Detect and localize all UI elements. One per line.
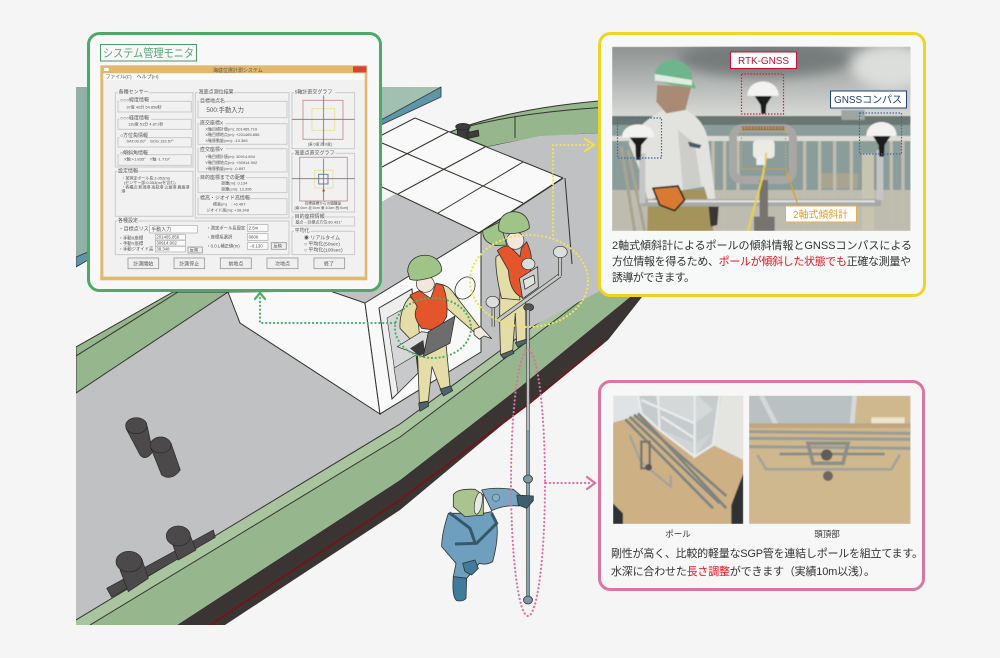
cabin walls xyxy=(228,178,640,414)
laptop xyxy=(397,316,455,357)
seabed cross graph xyxy=(292,149,355,212)
equipment photo xyxy=(612,40,931,231)
software window xyxy=(100,65,367,280)
GNSS compass label: GNSSコンパス xyxy=(834,94,902,106)
panel: GNSS equipment xyxy=(600,34,931,296)
sensors group xyxy=(115,89,193,167)
settings group: ・手動X座標 xyxy=(119,234,144,241)
control buttons xyxy=(128,258,345,269)
seabed results: 距離(m): 0.134 xyxy=(221,180,248,186)
photo captions: ポール xyxy=(665,529,691,539)
photo captions: 頭頂部 xyxy=(814,529,840,539)
monitor heading: システム管理モニタ xyxy=(103,46,194,60)
settings group: 38.348 xyxy=(156,247,170,252)
panel: system monitor xyxy=(88,34,380,290)
sounding pole xyxy=(524,310,532,604)
seabed results: 距離(cm): 13.395 xyxy=(221,186,252,192)
averaging options: ◉ リアルタイム xyxy=(304,234,340,241)
monitor heading xyxy=(100,44,196,61)
averaging options: ○ 平均化(100sec) xyxy=(304,246,343,253)
antenna cross graph xyxy=(292,89,355,149)
settings info xyxy=(115,167,193,216)
settings group: ・手動Y座標 xyxy=(119,240,144,247)
settings group: 30914.902 xyxy=(156,241,177,246)
compass highlights xyxy=(618,113,902,158)
green callout circle xyxy=(260,297,471,358)
pole photo xyxy=(613,396,743,524)
sensors group: 各種センサー xyxy=(119,89,149,96)
settings group: 手動入力 xyxy=(151,226,171,233)
backpack xyxy=(483,222,507,246)
GNSS description: 誘導ができます。 xyxy=(612,270,695,284)
pink arrow head xyxy=(587,477,595,489)
tilt meter label: 2軸式傾斜計 xyxy=(793,208,848,221)
sensors group: X軸:+1.835° Y軸:-1.719° xyxy=(124,156,171,162)
pole description: 剛性が高く、比較的軽量なSGP管を連結しポールを組立てます。 xyxy=(611,546,923,560)
seabed results: 標高(m) : +6.467 xyxy=(213,200,246,206)
seabed results: ジオイド高(m): +38.348 xyxy=(206,206,250,212)
sensors group: 37度 40分 54.858秒 xyxy=(126,103,162,109)
yellow callout circle xyxy=(470,145,590,327)
deck xyxy=(76,132,640,620)
yellow arrow head xyxy=(585,139,594,151)
seabed results: Y軸移動量(cm): -0.897 xyxy=(205,165,246,171)
boots xyxy=(501,339,527,358)
seabed cross graph: [南:0cm 北:0cm 東:10cm 西:0cm] xyxy=(295,205,348,210)
seabed results: 500:手動入力 xyxy=(206,105,244,114)
averaging options xyxy=(292,227,355,255)
settings group: −0.130 xyxy=(249,244,263,249)
cabin door recess xyxy=(379,289,418,399)
dotted callouts xyxy=(255,139,595,616)
pointing arm xyxy=(436,283,481,332)
arm xyxy=(496,250,520,300)
settings info: 港 xyxy=(121,188,125,194)
seabed results: Y軸目標計値(m): 30914.894 xyxy=(205,153,256,159)
control buttons: 次地点 xyxy=(275,260,290,267)
boots xyxy=(419,386,453,411)
seabed results: 直交座標X xyxy=(200,119,224,126)
starboard hull xyxy=(76,262,642,625)
tilt meter label xyxy=(786,206,856,222)
panel: pole xyxy=(600,382,924,590)
sensors group: SAT:00.00° SOG:133.57° xyxy=(126,139,174,144)
settings group: 各種設定 xyxy=(118,217,138,224)
seabed results: X軸目標計値(m): 201465.719 xyxy=(205,125,258,131)
cabin rear roof xyxy=(76,87,441,267)
seabed results: X軸目標地点(m): +201465.856 xyxy=(205,131,260,137)
settings group: 反映 xyxy=(190,247,199,254)
settings info: (センサー部:0.053(m)を含む) xyxy=(124,179,176,185)
ship illustration xyxy=(76,87,642,625)
seabed results: X軸移動量(cm): -13.365 xyxy=(205,137,248,143)
sensors group: ○方位角情報 xyxy=(120,132,148,139)
RTK-GNSS highlight xyxy=(742,74,784,114)
settings group: 反映 xyxy=(273,243,283,250)
GNSS description: 2軸式傾斜計によるポールの傾斜情報とGNSSコンパスによる xyxy=(612,238,912,252)
hand xyxy=(474,327,492,339)
green arrow head xyxy=(255,293,265,299)
surveyor behind with pole xyxy=(483,212,567,358)
vest xyxy=(410,283,447,331)
sensors group: ○○○緯度情報 xyxy=(120,97,149,104)
settings group: 0806 xyxy=(249,235,259,240)
seabed results: 海底点測位結果 xyxy=(199,89,234,96)
mooring bitts xyxy=(107,526,215,597)
software window: 海底位置計測システム xyxy=(213,67,263,74)
settings group: ・0.0.L補正値(m) xyxy=(206,242,240,249)
averaging options: ○ 平均化(50sec) xyxy=(304,240,340,247)
seabed results: Y軸目標地点(m): +30914.902 xyxy=(205,159,258,165)
sensors group: ○傾斜角情報 xyxy=(120,149,148,156)
control buttons: 計測開始 xyxy=(133,260,153,267)
settings group xyxy=(115,217,289,255)
legs xyxy=(500,290,526,355)
surveyor with laptop xyxy=(397,255,492,411)
pink callout ellipse xyxy=(511,350,590,616)
legs xyxy=(417,343,450,403)
GNSS description xyxy=(612,238,912,284)
seabed cross graph: 目標座標からの偏離量 xyxy=(305,200,342,205)
control buttons: 計測停止 xyxy=(179,260,199,267)
seabed results: 目標地点名 xyxy=(200,97,225,104)
face xyxy=(416,276,434,292)
pole description: 水深に合わせた長さ調整ができます（実績10m以浅）。 xyxy=(611,564,875,578)
settings group: ・測定ポール長設定 xyxy=(206,224,246,231)
helmet xyxy=(408,255,442,280)
settings group: ・目標点リスト xyxy=(119,225,154,232)
RTK-GNSS label: RTK-GNSS xyxy=(738,56,789,67)
settings group: 201465.856 xyxy=(156,235,180,240)
tilt meter highlight xyxy=(742,128,798,205)
seabed results: 標高・ジオイド高情報 xyxy=(200,195,250,202)
seabed results: 目的座標までの距離 xyxy=(200,174,245,181)
sensors group: 139度 51分 4.871秒 xyxy=(128,121,163,127)
oval on wall xyxy=(451,273,479,303)
bollard pair on deck xyxy=(126,418,180,477)
settings info: ・各種点:新潟港 高萩港 山島港 鹿島港 xyxy=(121,183,190,189)
rear bulwark xyxy=(450,100,610,147)
GNSS description: 方位情報を得るため、ポールが傾斜した状態でも正確な測量や xyxy=(612,254,911,268)
left arm xyxy=(400,297,419,342)
target info xyxy=(292,213,355,226)
GNSS compass label xyxy=(830,91,906,108)
vest xyxy=(497,242,531,297)
diver xyxy=(442,488,533,601)
t bar xyxy=(486,246,567,327)
target info: 目的座標情報 xyxy=(295,213,325,220)
control buttons: 終了 xyxy=(324,260,334,267)
sensors group: ○○○経度情報 xyxy=(120,115,149,122)
RTK-GNSS label xyxy=(730,52,796,68)
control buttons: 前地点 xyxy=(228,260,243,267)
target info: 基点→目標点方位:80.431° xyxy=(295,219,342,225)
software window: ファイル(F) ヘルプ(H) xyxy=(105,75,159,81)
seabed cross graph: 海底点直交グラフ xyxy=(295,149,335,156)
helmet xyxy=(499,212,529,234)
head section photo xyxy=(749,396,911,524)
settings info: ・某測定ポール長:3.052(m) xyxy=(121,175,171,181)
photo captions xyxy=(665,529,840,539)
cabin roof xyxy=(365,118,563,233)
seabed results: 直交座標Y xyxy=(200,146,224,153)
antenna cross graph: [東:0度 西:0度] xyxy=(308,142,332,147)
antenna cross graph: 5軸計直交グラフ xyxy=(295,89,332,96)
settings group: 2.5m xyxy=(249,226,259,231)
pole description xyxy=(611,546,923,578)
seabed results xyxy=(195,89,289,218)
settings group: ・手動ジオイド高 xyxy=(119,246,154,253)
far bollard xyxy=(456,123,479,139)
face xyxy=(507,232,524,249)
settings group: ・座標系選択 xyxy=(206,233,233,240)
averaging options: 平均化 xyxy=(295,227,310,234)
settings info: 設定情報 xyxy=(118,167,138,174)
port bulwark xyxy=(76,292,228,393)
